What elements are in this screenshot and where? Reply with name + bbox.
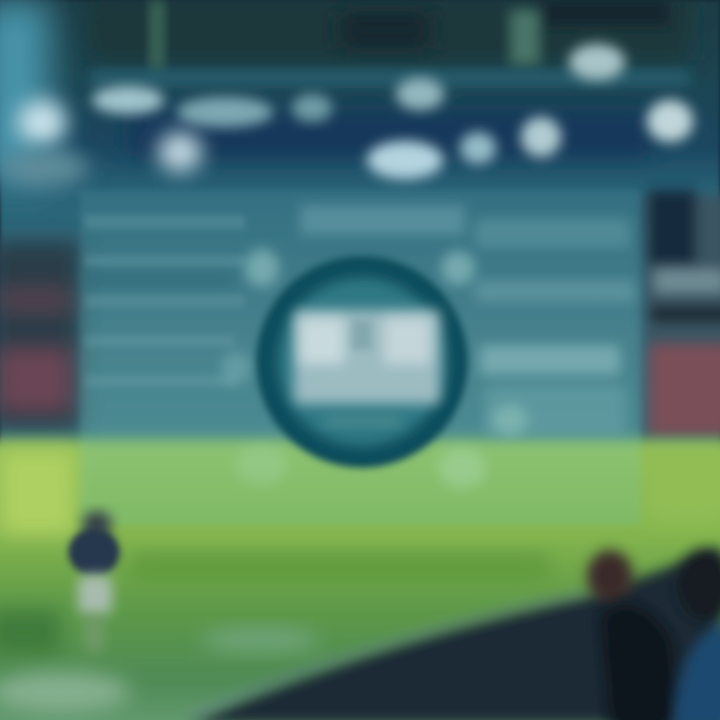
foreground spectators xyxy=(587,549,720,720)
player on pitch xyxy=(68,511,120,651)
pitch xyxy=(0,440,720,720)
central circle badge xyxy=(256,256,468,468)
left stands xyxy=(0,240,80,430)
translucent central panel xyxy=(80,190,640,525)
foreground barrier xyxy=(190,548,720,720)
ceiling lights xyxy=(1,44,693,186)
right stands xyxy=(644,190,720,440)
